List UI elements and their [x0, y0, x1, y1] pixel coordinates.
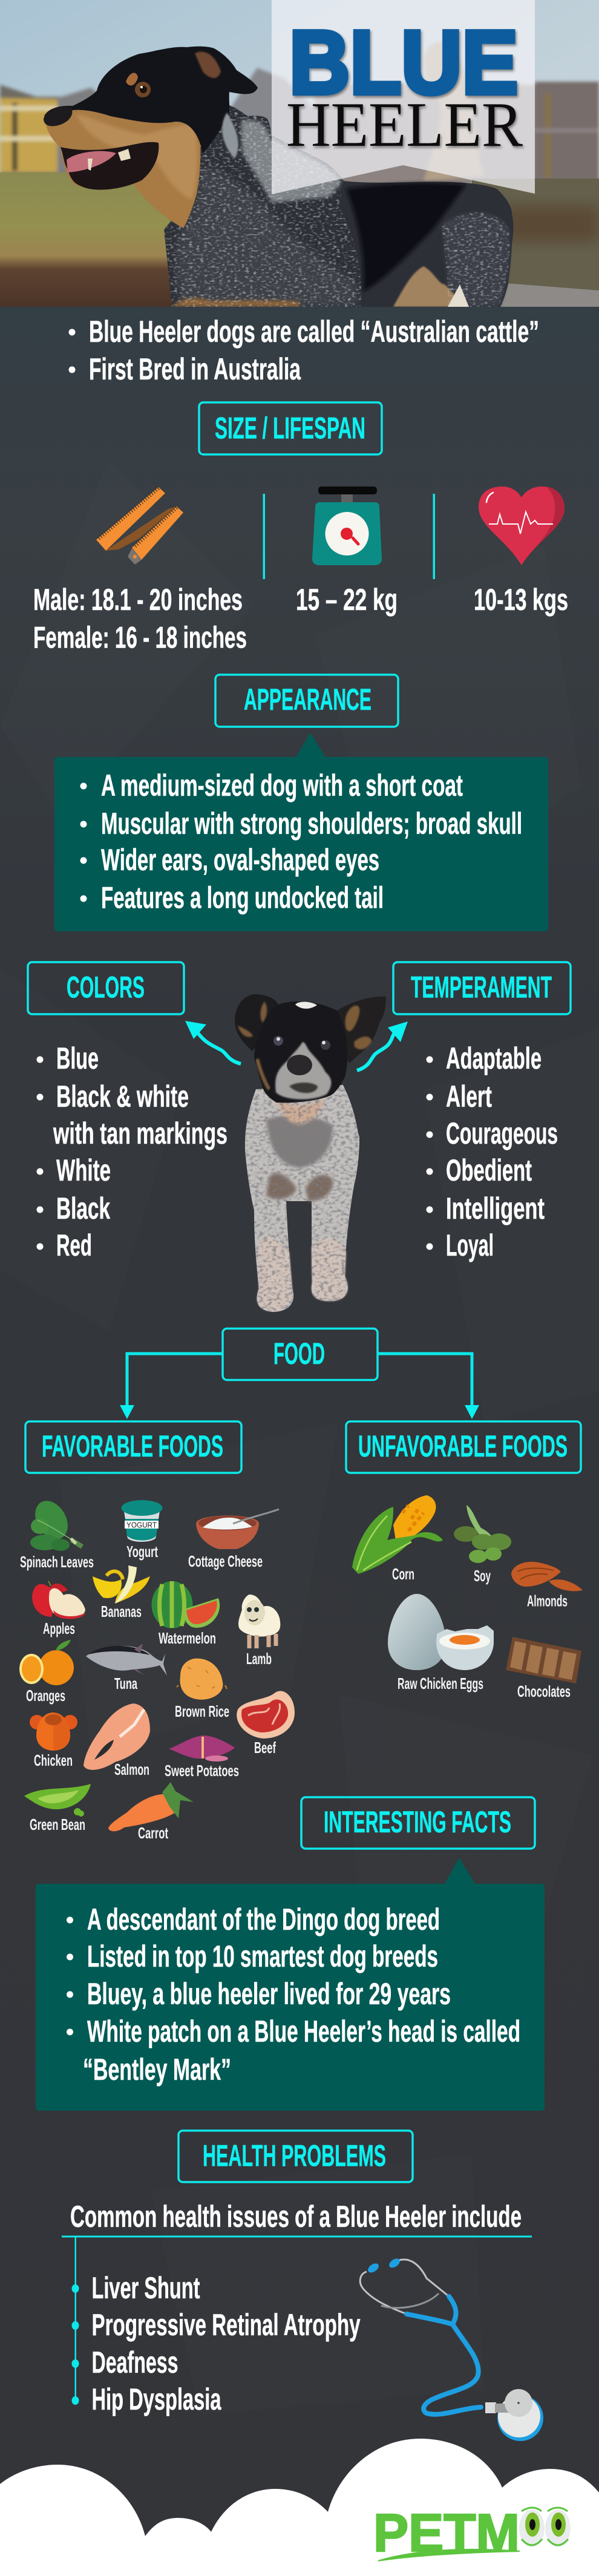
temperament list [426, 1041, 558, 1262]
heading: size / lifespan: SIZE / LIFESPAN [215, 411, 365, 445]
heading: colors: COLORS [67, 971, 145, 1005]
food: yogurt: YOGURT [126, 1520, 157, 1530]
food: cottage cheese [196, 1509, 279, 1549]
food: soy [454, 1505, 511, 1563]
hero photo [0, 0, 599, 307]
label: yogurt: Yogurt [126, 1542, 158, 1561]
food: green bean [24, 1784, 91, 1817]
heading: favorable foods [25, 1421, 241, 1473]
heading: appearance [215, 675, 398, 727]
colors list [36, 1041, 227, 1262]
colors list: Red [56, 1228, 92, 1262]
colors list: Black [56, 1191, 110, 1225]
panel: interesting facts [36, 1858, 545, 2111]
favorable foods icons and labels [19, 1495, 295, 1842]
temperament list: Obedient [446, 1153, 532, 1187]
panel: interesting facts: “Bentley Mark” [83, 2053, 231, 2086]
heading: colors [28, 962, 184, 1014]
label: brown rice: Brown Rice [175, 1702, 229, 1720]
label: soy: Soy [474, 1567, 491, 1585]
divider [263, 494, 265, 579]
icon: stethoscope [360, 2256, 543, 2441]
heading: size / lifespan [199, 402, 382, 454]
colors list: Black & white [56, 1080, 189, 1113]
food: sweet potato [169, 1735, 235, 1762]
label: apples: Apples [43, 1619, 75, 1637]
title word: BLUE: BLUE [289, 13, 518, 113]
panel: appearance [54, 733, 548, 931]
size values: Male: 18.1 - 20 inches [33, 583, 243, 617]
food: spinach [28, 1495, 82, 1551]
logo: petmoo: PETM [373, 2503, 520, 2563]
label: salmon: Salmon [114, 1760, 149, 1778]
temperament list: Loyal [446, 1228, 494, 1262]
label: almonds: Almonds [527, 1591, 568, 1610]
arrow: to colors [185, 1021, 241, 1064]
size values [33, 583, 568, 655]
tail behind panel [424, 42, 484, 182]
heading: favorable foods: FAVORABLE FOODS [42, 1429, 223, 1463]
label: carrot: Carrot [138, 1824, 168, 1842]
food: raw chicken eggs [388, 1594, 494, 1670]
temperament list: Alert [446, 1080, 492, 1113]
label: lamb: Lamb [246, 1650, 272, 1668]
food: apples [32, 1581, 85, 1619]
temperament list: Adaptable [446, 1041, 542, 1075]
panel: appearance: Features a long undocked tail [101, 881, 384, 915]
arrow: to temperament [357, 1021, 408, 1070]
label: chicken: Chicken [34, 1751, 73, 1769]
white clouds footer [0, 2439, 599, 2576]
food: yogurt [121, 1500, 162, 1542]
puppy photo [235, 994, 386, 1312]
title backdrop panel [272, 0, 535, 194]
label: beef: Beef [254, 1739, 276, 1757]
label: cottage cheese: Cottage Cheese [188, 1552, 263, 1570]
health problems timeline [71, 2237, 361, 2416]
title [286, 13, 523, 160]
heading: food: FOOD [273, 1337, 325, 1371]
food: tuna [86, 1644, 167, 1676]
food: oranges [19, 1640, 74, 1685]
food: chocolates [506, 1637, 581, 1683]
arrow: to unfavorable foods [378, 1354, 479, 1419]
intro bullets: First Bred in Australia [89, 352, 301, 386]
dog body [164, 105, 513, 307]
heading: health problems [178, 2131, 413, 2182]
heading: interesting facts [301, 1797, 535, 1849]
temperament list: Intelligent [446, 1191, 545, 1225]
food: carrot [108, 1782, 194, 1831]
food: lamb [238, 1594, 280, 1648]
dog head [44, 47, 258, 228]
size values: 15 – 22 kg [296, 583, 398, 617]
intro bullets [69, 315, 539, 386]
food: chicken [30, 1712, 77, 1751]
label: green bean: Green Bean [30, 1815, 85, 1834]
label: tuna: Tuna [114, 1674, 137, 1693]
food: brown rice [177, 1659, 227, 1700]
unfavorable foods icons and labels [352, 1495, 583, 1700]
food: corn [352, 1495, 443, 1574]
heading: health problems: HEALTH PROBLEMS [203, 2138, 386, 2172]
colors list: Blue [56, 1041, 99, 1075]
arrow: to favorable foods [120, 1354, 222, 1419]
food: watermelon [151, 1581, 220, 1628]
health problems timeline: Progressive Retinal Atrophy [92, 2308, 361, 2342]
divider [433, 494, 435, 579]
title word: HEELER: HEELER [286, 89, 523, 160]
label: corn: Corn [392, 1565, 414, 1583]
icon: weighing scale [312, 487, 382, 565]
food: salmon [83, 1703, 150, 1770]
icon: tape measure [96, 487, 183, 565]
label: bananas: Bananas [101, 1602, 142, 1621]
label: watermelon: Watermelon [159, 1629, 216, 1647]
health problems timeline: Liver Shunt [92, 2271, 200, 2305]
health problems timeline: Hip Dysplasia [92, 2382, 221, 2416]
size values: Female: 16 - 18 inches [33, 621, 247, 655]
heading: appearance: APPEARANCE [244, 683, 372, 716]
label: raw chicken eggs: Raw Chicken Eggs [398, 1674, 483, 1693]
food: beef [237, 1691, 295, 1739]
food: bananas [93, 1565, 150, 1604]
heading: unfavorable foods [346, 1421, 581, 1473]
panel: appearance: Wider ears, oval-shaped eyes [101, 843, 379, 877]
label: sweet potatoes: Sweet Potatoes [165, 1762, 239, 1780]
colors list: White [56, 1153, 111, 1187]
food: almonds [511, 1562, 583, 1591]
icon: heart with pulse [479, 487, 565, 565]
heading: temperament [393, 962, 571, 1014]
heading: food [223, 1329, 378, 1380]
label: spinach leaves: Spinach Leaves [20, 1553, 94, 1571]
label: oranges: Oranges [26, 1686, 65, 1705]
health problems timeline: Deafness [92, 2345, 178, 2379]
colors list: with tan markings [53, 1116, 227, 1150]
